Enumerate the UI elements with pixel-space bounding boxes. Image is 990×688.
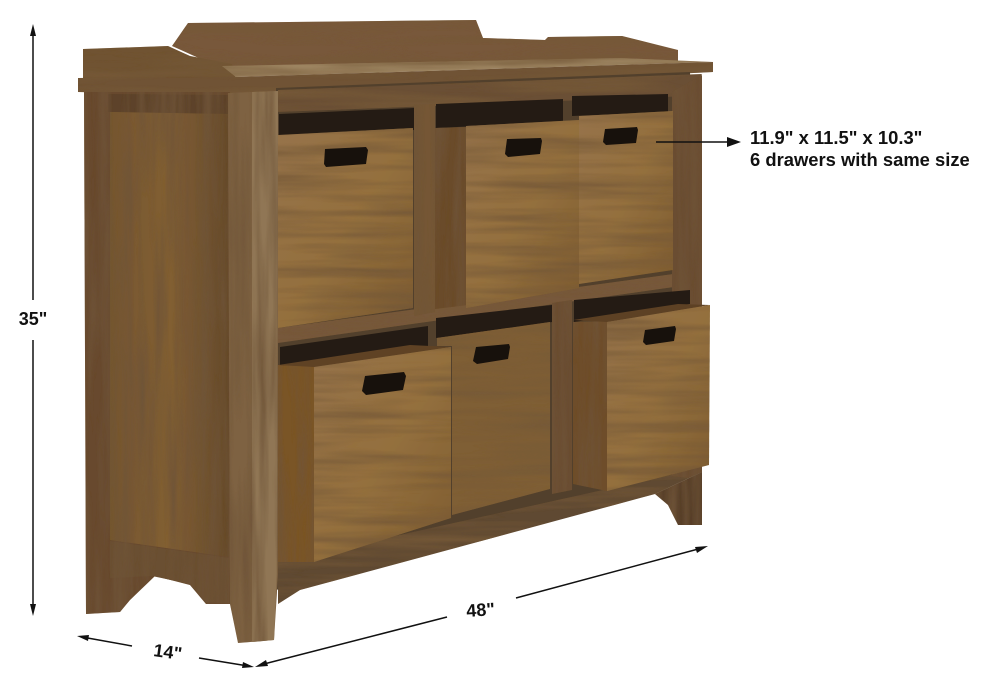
drawer openings shadow — [279, 94, 690, 366]
cabinet front frame — [278, 74, 702, 604]
cabinet back riser — [83, 20, 678, 78]
dimension: width 48 inches: 48" — [466, 599, 496, 621]
cabinet vertical dividers and right post — [414, 75, 702, 525]
drawer top middle — [435, 120, 579, 309]
handle — [473, 344, 510, 364]
handle — [643, 326, 676, 345]
cabinet side panel — [84, 92, 230, 614]
drawer bottom middle — [437, 322, 550, 515]
drawer bottom left — [278, 345, 451, 562]
drawer bottom right — [573, 304, 710, 491]
handle — [362, 372, 406, 395]
handle — [603, 127, 638, 145]
dimension: height 35 inches — [19, 24, 47, 616]
drawer top right — [579, 111, 673, 284]
cabinet — [78, 20, 713, 643]
dimension: width 48 inches — [255, 546, 708, 667]
cabinet top board — [78, 58, 713, 96]
callout: drawer size: 11.9" x 11.5" x 10.3" — [750, 127, 922, 148]
cabinet front left leg — [228, 91, 278, 643]
dimension: depth 14 inches — [77, 635, 254, 668]
dimension: height 35 inches: 35" — [19, 309, 47, 329]
dimension: depth 14 inches: 14" — [152, 640, 183, 664]
handle — [505, 138, 542, 157]
callout: drawer size: 6 drawers with same size — [750, 149, 970, 170]
arrow: drawer callout pointer — [656, 137, 741, 147]
handle — [324, 147, 368, 167]
cabinet interior dark back — [276, 72, 702, 590]
callout: drawer size — [750, 127, 970, 170]
drawer top left — [278, 128, 413, 328]
